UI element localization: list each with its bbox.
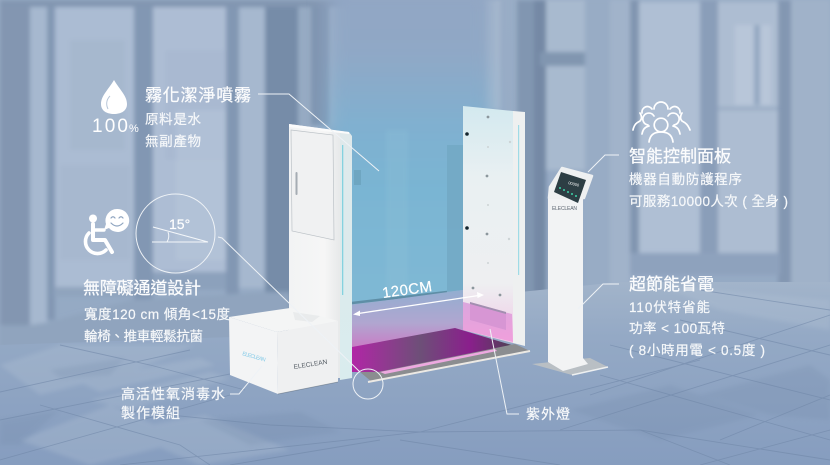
kiosk logo: ELECLEAN xyxy=(552,206,577,212)
left cabinet pillar xyxy=(289,124,352,380)
lower glow area xyxy=(352,290,463,350)
floor mat with purple light xyxy=(352,328,530,382)
text: mist description: 無副產物 xyxy=(145,133,201,149)
kiosk control panel xyxy=(532,168,608,375)
text: energy saving description: 110伏特省能 xyxy=(629,300,710,315)
leader lines xyxy=(218,94,619,414)
text: barrier free description xyxy=(84,306,230,344)
magnifier circle: 15 degree slope xyxy=(136,194,215,273)
text: energy saving description xyxy=(629,300,765,358)
kiosk screen xyxy=(554,172,586,203)
icon: water drop xyxy=(101,80,127,114)
kiosk screen: 00000 xyxy=(568,180,581,188)
uv lamp xyxy=(463,302,513,342)
text: water module label xyxy=(121,386,225,421)
text: control panel description: 機器自動防護程序 xyxy=(629,172,742,187)
heading: mist: 霧化潔淨噴霧 xyxy=(145,86,251,105)
box cyan label: ELECLEAN xyxy=(241,351,266,364)
icon: group of people xyxy=(633,102,690,142)
text: uv lamp label: 紫外燈 xyxy=(526,406,570,422)
heading: barrier free: 無障礙通道設計 xyxy=(83,279,201,298)
text: control panel description: 可服務10000人次 ( 全身 ) xyxy=(629,194,788,209)
text: energy saving description: 功率 < 100瓦特 xyxy=(629,320,725,336)
text: barrier free description: 寬度120 cm 傾角<15度 xyxy=(84,306,230,322)
text: energy saving description: ( 8小時用電 < 0.5度 ) xyxy=(629,343,765,358)
heading: energy saving: 超節能省電 xyxy=(629,275,714,294)
text: water module label: 製作模組 xyxy=(121,405,180,421)
dimension arrow: 120CM xyxy=(381,278,433,302)
text: mist description xyxy=(145,112,202,149)
magnifier circle: 15 degree slope: 15° xyxy=(169,216,190,232)
100 percent label: 100 xyxy=(92,116,128,137)
spray mist xyxy=(328,0,492,320)
dimension arrow xyxy=(353,278,484,316)
cabinet door xyxy=(291,130,334,240)
icon: wheelchair with smile xyxy=(85,209,129,254)
right door panel xyxy=(463,106,525,346)
box logo: ELECLEAN xyxy=(293,359,328,371)
100 percent label: % xyxy=(129,123,139,135)
text: mist description: 原料是水 xyxy=(145,112,202,127)
text: barrier free description: 輪椅、推車輕鬆抗菌 xyxy=(84,328,203,344)
text: water module label: 高活性氧消毒水 xyxy=(121,386,225,402)
text: control panel description xyxy=(629,172,788,209)
magnifier circle: ramp xyxy=(353,369,383,399)
floor xyxy=(0,282,830,465)
heading: control panel: 智能控制面板 xyxy=(629,147,731,166)
water module box xyxy=(229,308,338,394)
